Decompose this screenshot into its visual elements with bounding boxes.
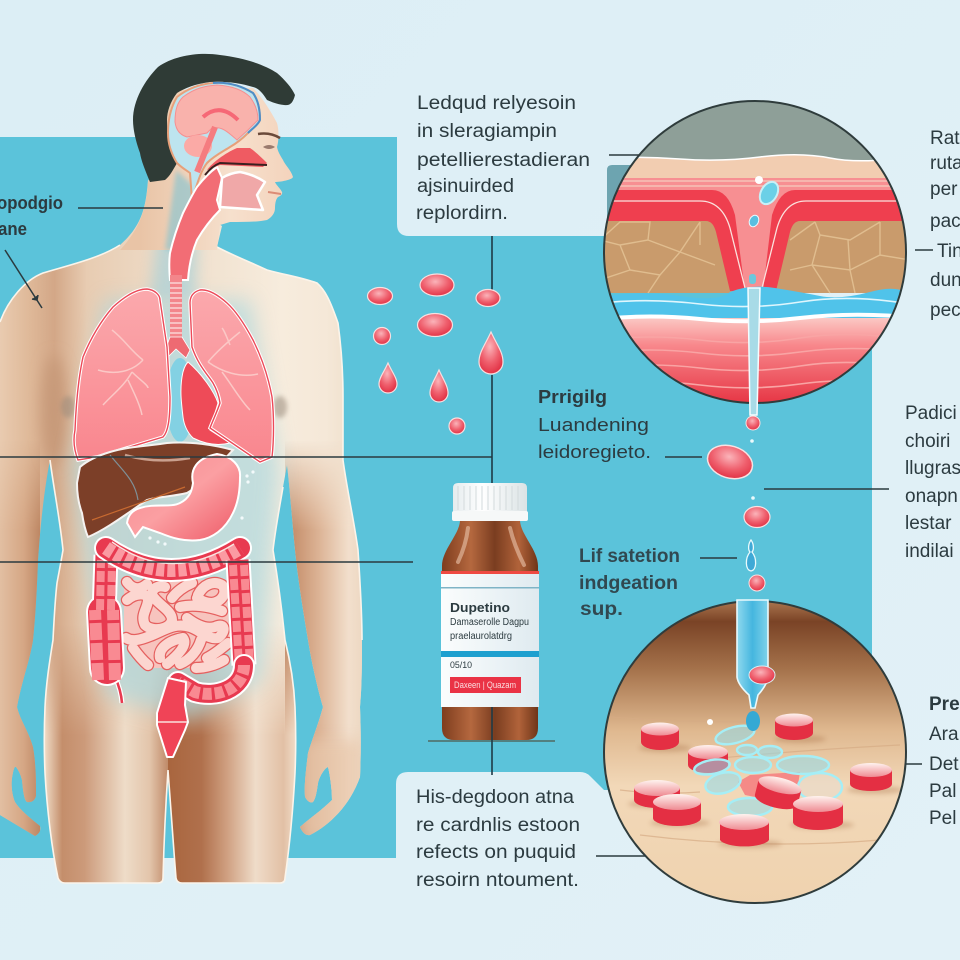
hand tone — [300, 740, 362, 840]
callout: top description: ajsinuirded — [417, 176, 514, 197]
callout: right top — [930, 128, 960, 321]
skin — [624, 154, 886, 178]
line: mid right — [764, 488, 889, 490]
tablets front — [653, 773, 843, 846]
callout: top description: in sleragiampin — [417, 121, 557, 142]
tube — [748, 288, 760, 415]
label: Damaserolle Dagpu — [450, 617, 529, 628]
callout: right middle — [905, 403, 960, 562]
descending colon — [233, 560, 250, 665]
nipples — [61, 396, 287, 418]
sigmoid colon — [178, 665, 244, 694]
callout: right top: per — [930, 179, 958, 200]
figure: human body — [0, 54, 380, 890]
throat tube — [169, 167, 222, 280]
label: prrigilg: leidoregieto. — [538, 442, 651, 462]
brain cavity — [168, 83, 260, 200]
arm shading left — [0, 458, 40, 836]
organ glow — [72, 300, 280, 720]
callout: bottom description — [416, 787, 580, 891]
arrow: skin pointer — [5, 250, 42, 308]
line: callout to pills — [491, 236, 493, 483]
cavity blue edge — [213, 83, 260, 133]
hair — [133, 54, 295, 182]
line: horizontal pointers across body — [0, 208, 492, 562]
callout: right lower: Ara — [929, 724, 959, 745]
callout: right middle: llugras — [905, 458, 960, 479]
label: lif satetion: Lif satetion — [579, 546, 680, 567]
callout: bottom description: resoirn ntoument. — [416, 870, 579, 891]
callout: top description: Ledqud relyesoin — [417, 93, 576, 114]
callout: right top: pec — [930, 300, 960, 321]
label: Daxeen | Quazam — [454, 680, 516, 690]
panel: upper circular skin cross-section — [600, 100, 910, 415]
label: lif satetion: indgeation — [579, 573, 678, 594]
right lung — [190, 290, 274, 462]
callout: bottom description: refects on puquid — [416, 842, 576, 863]
cap — [452, 483, 528, 521]
label — [441, 571, 539, 707]
stomach droplets — [148, 470, 255, 546]
left lung — [74, 289, 170, 460]
teal tab behind upper circle — [607, 165, 640, 237]
dark top — [639, 102, 874, 160]
line: bottle to bottom callout — [491, 707, 493, 775]
small intestine — [124, 580, 230, 668]
circle outline — [604, 601, 906, 903]
liver — [77, 442, 233, 537]
tablets back — [634, 714, 892, 808]
line: right lower — [905, 763, 922, 765]
label: prrigilg: Luandening — [538, 415, 649, 435]
dissolving outlines — [693, 722, 842, 816]
skin silhouette — [0, 170, 380, 890]
label: 05/10 — [450, 660, 472, 670]
callout: right middle: choiri — [905, 431, 950, 452]
label: prrigilg: Prrigilg — [538, 387, 607, 407]
neck glow — [145, 250, 204, 304]
head — [120, 54, 295, 280]
blue water layer — [612, 286, 900, 318]
callout: right lower — [929, 694, 960, 829]
trachea — [166, 275, 190, 358]
callout: top description — [416, 93, 590, 224]
callout: right lower: Pal — [929, 781, 956, 802]
palate line — [205, 163, 267, 175]
label: lif satetion — [579, 546, 680, 620]
callout: right middle: lestar — [905, 513, 952, 534]
label: prrigilg — [538, 387, 651, 462]
brainstem — [197, 127, 215, 172]
appendix — [115, 677, 122, 703]
blue gap between lungs — [166, 358, 194, 442]
mouth lip — [268, 192, 281, 194]
callout: bottom description: His-degdoon atna — [416, 787, 574, 808]
cerebellum — [184, 135, 212, 157]
oral cavity — [220, 172, 265, 210]
line: to top circle — [609, 154, 640, 156]
label: lif satetion: sup. — [580, 599, 623, 620]
icon: water drop — [746, 540, 756, 571]
chest side shading — [42, 355, 66, 465]
silhouette edge — [0, 245, 362, 883]
rectum — [157, 678, 188, 757]
brain — [175, 85, 258, 140]
callout: top description: petellierestadieran — [417, 150, 590, 171]
leg shading right — [168, 640, 295, 882]
blue central panel — [0, 137, 872, 858]
large intestine — [95, 542, 250, 703]
bottle — [428, 483, 555, 741]
glass highlights — [458, 528, 524, 565]
dropper — [737, 600, 775, 731]
neck and face — [120, 88, 293, 250]
callout: right top: Rat — [930, 128, 960, 149]
callout: bottom description: re cardnlis estoon — [416, 815, 580, 836]
glass — [442, 521, 538, 740]
label: left body — [0, 193, 63, 239]
callout: top description: replordirn. — [416, 203, 508, 224]
callout: right lower: Pel — [929, 808, 956, 829]
label: praelaurolatdrg — [450, 631, 512, 642]
callout: right middle: Padici — [905, 403, 957, 424]
arm shading right — [285, 446, 362, 836]
neck shadow — [165, 170, 198, 250]
callout: right top: pac — [930, 211, 960, 232]
heart — [181, 362, 230, 444]
line: to lower circle — [596, 855, 646, 857]
tablet shadows — [628, 735, 903, 848]
panel: lower circular tablets on table — [600, 600, 910, 910]
nasal cavity — [207, 148, 267, 170]
pills falling centre — [703, 416, 770, 591]
stomach — [127, 454, 240, 541]
corpus — [203, 110, 238, 120]
line: right top — [915, 249, 933, 251]
leg shading left — [45, 642, 168, 882]
callout: right lower: Pre — [929, 694, 960, 715]
eye and brow — [258, 134, 280, 149]
broken tablet — [738, 772, 800, 797]
pills and drops scatter — [368, 274, 503, 434]
circle outline — [604, 101, 906, 403]
line: prrigilg — [665, 456, 702, 458]
callout: right middle: onapn — [905, 486, 958, 507]
deep red layers — [621, 318, 890, 402]
callout: right middle: indilai — [905, 541, 954, 562]
label: Dupetino — [450, 600, 510, 615]
transverse colon — [106, 542, 240, 570]
red funnel band — [608, 190, 902, 291]
ascending colon — [95, 555, 115, 680]
droplets — [758, 180, 780, 206]
bottle shadow — [428, 740, 555, 742]
callout: right lower: Det — [929, 754, 959, 775]
line: lif satetion — [700, 557, 737, 559]
brown cells — [600, 218, 910, 293]
